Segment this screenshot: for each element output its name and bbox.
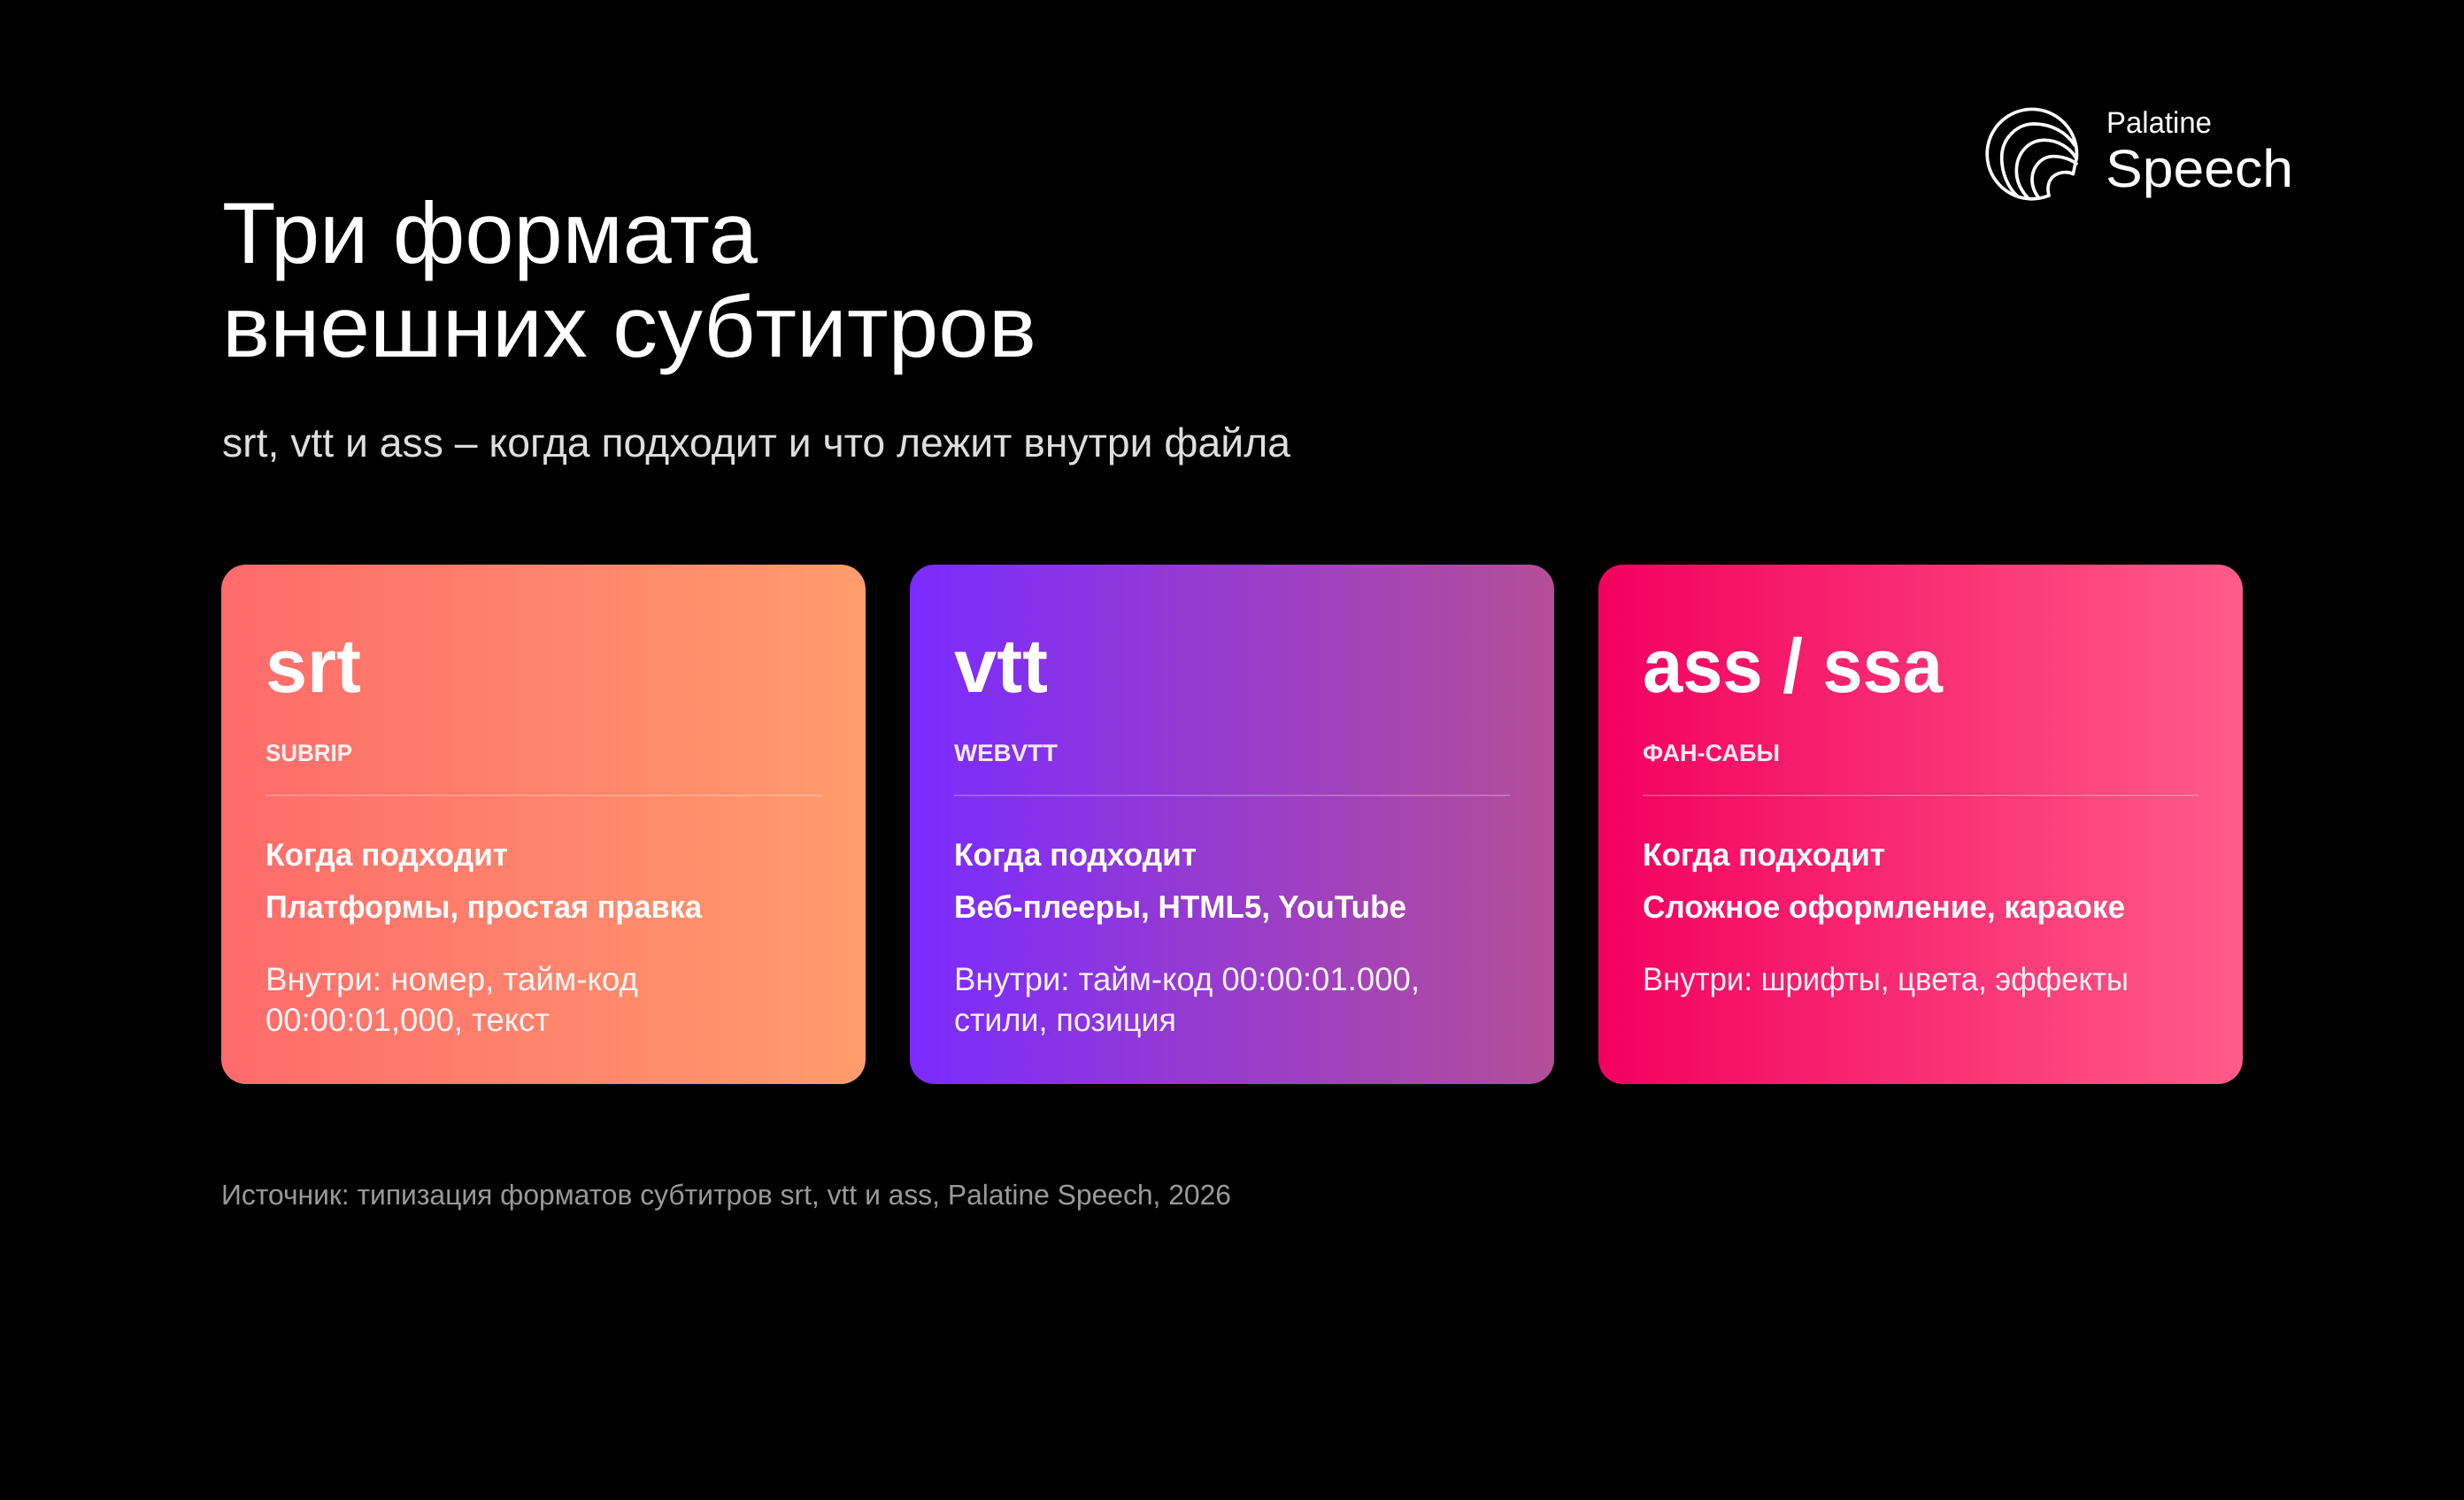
card background	[1598, 565, 2243, 1084]
contents	[266, 961, 638, 1038]
use cases: Сложное оформление, караоке	[1643, 888, 2125, 925]
contents: Внутри: шрифты, цвета, эффекты	[1643, 961, 2129, 997]
logo text: Speech	[2106, 139, 2293, 198]
use cases: Веб-плееры, HTML5, YouTube	[954, 888, 1406, 925]
format name: ass / ssa	[1643, 624, 1944, 709]
format label: ФАН-САБЫ	[1643, 740, 1780, 766]
contents: Внутри: номер, тайм-код	[266, 961, 638, 997]
contents	[954, 961, 1420, 1038]
logo text: Palatine	[2106, 106, 2212, 140]
format name: srt	[266, 624, 361, 709]
when suitable heading: Когда подходит	[954, 836, 1197, 873]
when suitable heading: Когда подходит	[266, 836, 508, 873]
format label: WEBVTT	[954, 740, 1059, 766]
panel: ass / ssa	[1598, 565, 2243, 1084]
contents: 00:00:01,000, текст	[266, 1002, 550, 1038]
panel: srt	[221, 565, 866, 1084]
format name: vtt	[954, 624, 1048, 709]
icon: concentric wave logo mark	[1987, 109, 2076, 199]
title: Три формата	[222, 184, 758, 281]
use cases: Платформы, простая правка	[266, 888, 703, 925]
panel: vtt	[910, 565, 1554, 1084]
format label: SUBRIP	[266, 740, 352, 766]
subtitle: srt, vtt и ass – когда подходит и что лежит внутри файла	[222, 419, 1290, 465]
logo: Palatine Speech	[1987, 106, 2293, 199]
title: внешних субтитров	[222, 278, 1036, 375]
card background	[221, 565, 866, 1084]
contents: стили, позиция	[954, 1002, 1176, 1038]
title	[222, 184, 1036, 375]
source footnote: Источник: типизация форматов субтитров srt, vtt и ass, Palatine Speech, 2026	[221, 1179, 1231, 1211]
when suitable heading: Когда подходит	[1643, 836, 1885, 873]
card background	[910, 565, 1554, 1084]
logo text	[2106, 106, 2293, 198]
contents: Внутри: тайм-код 00:00:01.000,	[954, 961, 1420, 997]
